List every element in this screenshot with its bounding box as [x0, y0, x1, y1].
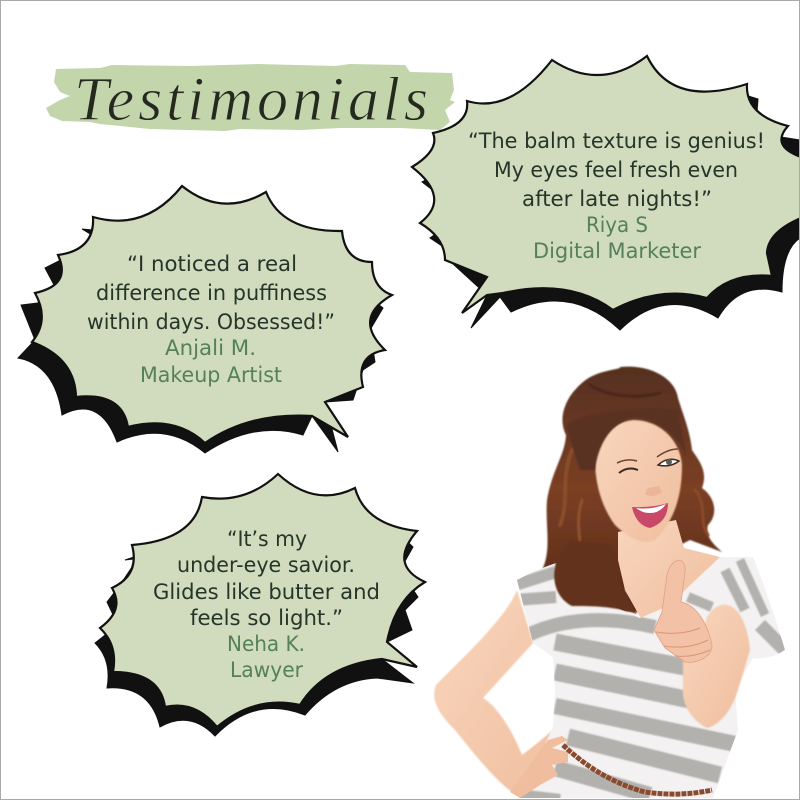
- quote: feels so light.”: [190, 606, 343, 630]
- open eye: [658, 459, 679, 466]
- nose: [645, 486, 662, 496]
- attribution: Makeup Artist: [140, 363, 282, 387]
- winking eye: [619, 469, 638, 473]
- attribution: Anjali M.: [165, 336, 256, 360]
- hair over forehead: [566, 408, 686, 470]
- title: Testimonials on brush stroke: [46, 64, 455, 134]
- quote: within days. Obsessed!”: [87, 310, 335, 334]
- bubble body: [32, 186, 392, 443]
- attribution: Digital Marketer: [533, 239, 701, 263]
- attribution: Riya S: [586, 213, 648, 237]
- left arm: [434, 590, 567, 795]
- bubble body: [412, 56, 800, 313]
- smiling mouth: [632, 503, 668, 528]
- thumbs-up fist: [654, 560, 712, 662]
- attribution: [227, 632, 305, 682]
- quote: My eyes feel fresh even: [494, 158, 738, 182]
- attribution: [140, 336, 282, 387]
- speech bubble: Neha K.: [95, 474, 425, 736]
- quote: [153, 527, 380, 630]
- heading text: Testimonials: [74, 66, 428, 134]
- quote: under-eye savior.: [177, 553, 355, 577]
- quote: “The balm texture is genius!: [468, 129, 765, 153]
- bubble shadow: [18, 229, 383, 453]
- bubble shadow: [422, 95, 800, 330]
- neck and chest: [618, 520, 720, 625]
- quote: Glides like butter and: [153, 580, 380, 604]
- hand on hip: [510, 736, 568, 798]
- attribution: Neha K.: [227, 632, 305, 656]
- raised forearm: [683, 605, 750, 728]
- speech bubble: Anjali M.: [18, 186, 392, 453]
- attribution: [533, 213, 701, 263]
- eyebrows: [617, 449, 678, 463]
- brush stroke background: [46, 64, 455, 131]
- quote: “It’s my: [227, 527, 307, 551]
- shirt with stripes: [510, 550, 795, 800]
- bubble body: [100, 474, 425, 727]
- quote: “I noticed a real: [127, 252, 297, 276]
- speech bubble: Riya S: [412, 56, 800, 330]
- quote: [87, 252, 335, 334]
- hair highlights: [560, 385, 708, 580]
- lower front hair: [554, 540, 637, 614]
- braided belt: [563, 745, 712, 794]
- quote: after late nights!”: [522, 187, 712, 211]
- attribution: Lawyer: [230, 658, 303, 682]
- quote: difference in puffiness: [96, 281, 327, 305]
- bubble shadow: [95, 530, 418, 736]
- quote: [468, 129, 765, 211]
- illustration: winking woman giving thumbs up: [434, 367, 795, 800]
- back hair: [542, 367, 722, 612]
- face: [595, 420, 682, 542]
